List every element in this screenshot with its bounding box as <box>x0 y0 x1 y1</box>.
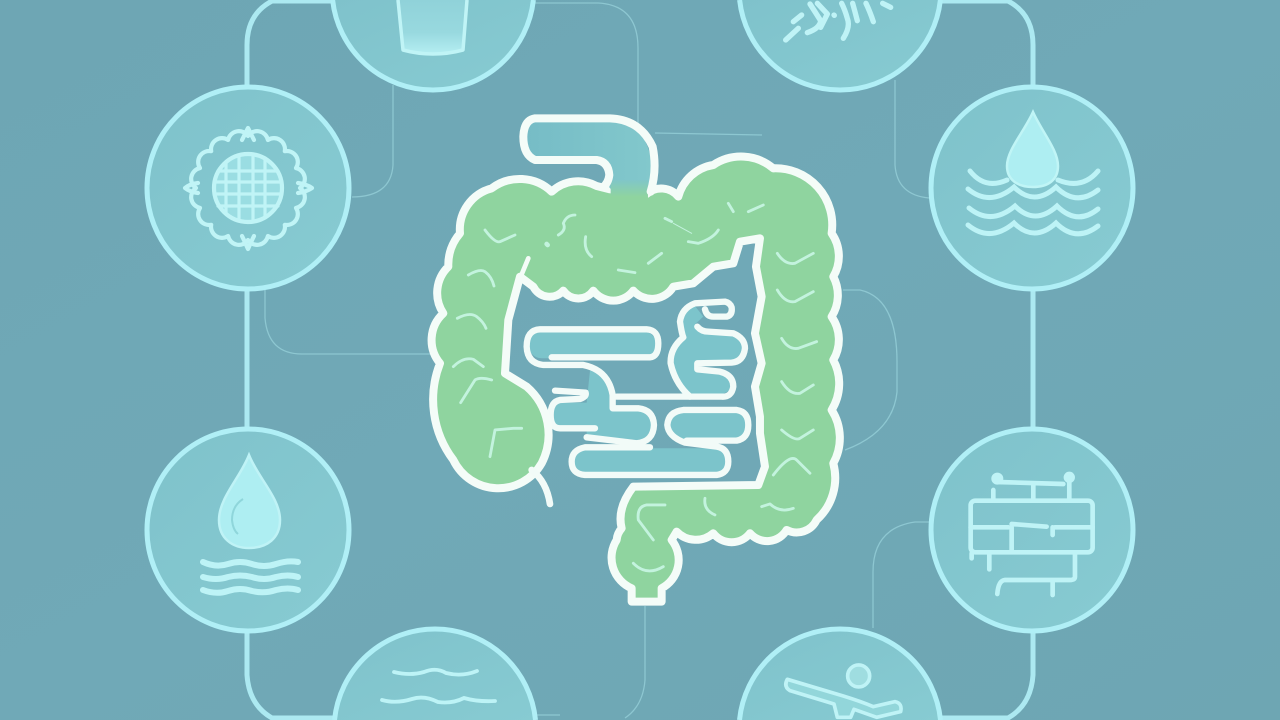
icon: water drop right <box>1007 112 1058 187</box>
icon: waves right <box>968 171 1098 234</box>
panel: droplet over waves circle, left <box>147 429 349 631</box>
panel: exercise circle <box>740 629 940 720</box>
stomach outlet outline <box>523 118 655 192</box>
panel: fibre strands circle <box>740 0 940 90</box>
appendix <box>532 470 550 504</box>
circle rim <box>333 0 533 90</box>
icon: fibre strands <box>786 3 891 40</box>
panel: water glass circle <box>333 0 533 90</box>
small intestine fill <box>528 306 748 475</box>
icon: stacked blocks <box>971 474 1093 595</box>
central digestive system illustration <box>432 118 840 602</box>
colon <box>432 157 840 602</box>
thick connector lines <box>247 1 1033 718</box>
icon: gentle waves <box>382 670 495 702</box>
panel: sunflower seed circle <box>147 87 349 289</box>
gut flora squiggles <box>453 203 817 571</box>
circle rim <box>334 629 536 720</box>
circle rim <box>740 0 940 90</box>
icon: stretching figure <box>786 665 901 717</box>
icon: water drop left <box>219 455 280 548</box>
small intestine outline <box>527 302 748 475</box>
panel: brick wall circle <box>931 429 1133 631</box>
thin connector lines <box>265 3 929 718</box>
panel: gentle waves circle <box>334 629 536 720</box>
circle rim <box>740 629 940 720</box>
icon: drop highlight <box>232 499 243 534</box>
icon: sunflower <box>185 128 312 249</box>
icon: glass outline <box>398 0 467 54</box>
panel: droplet over waves circle, right <box>931 87 1133 289</box>
colon spur <box>519 258 528 280</box>
stomach outlet fill <box>524 120 653 190</box>
stomach outlet merge into colon <box>611 180 648 203</box>
icon: glass fill <box>398 0 467 54</box>
icon: waves left <box>203 561 298 593</box>
